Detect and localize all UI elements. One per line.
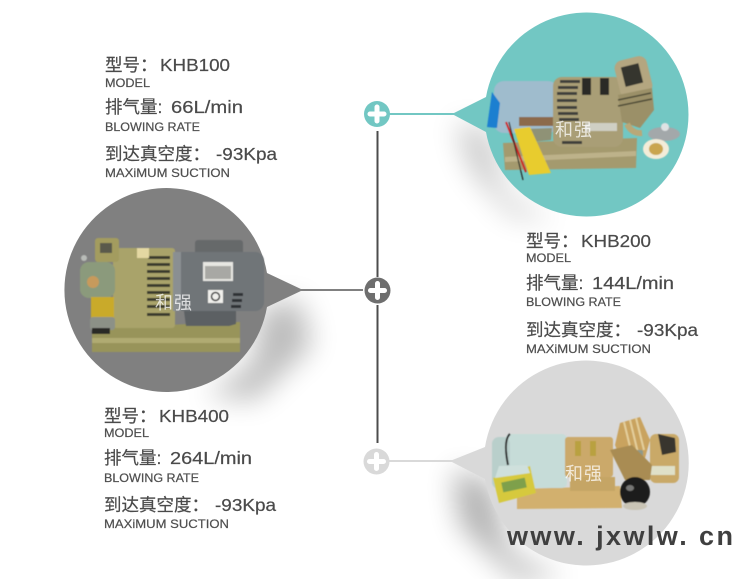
text block: KHB100 specs: 排气量: (105, 97, 162, 117)
text block: KHB400 specs: 排气量: (104, 448, 161, 468)
watermark: 和强 (565, 464, 603, 484)
text block: KHB100 specs: MODEL (105, 76, 150, 90)
panel: KHB400 grey bubble (64, 188, 391, 392)
text block: KHB200 specs: 144L/min (592, 273, 674, 293)
text block: KHB200 specs (526, 231, 698, 356)
panel: KHB100 light bubble (364, 360, 689, 566)
bubble shape (452, 12, 688, 216)
shadow: left bubble (205, 300, 312, 400)
text block: KHB200 specs: BLOWING RATE (526, 295, 621, 309)
pump illustration: KHB400 (80, 238, 264, 352)
text block: KHB200 specs: 到达真空度： (526, 320, 631, 340)
text block: KHB200 specs: KHB200 (581, 231, 651, 251)
bubble shape (450, 360, 689, 566)
text block: KHB400 specs: -93Kpa (215, 495, 276, 515)
text block: KHB100 specs (105, 55, 277, 180)
text block: KHB200 specs: MAXiMUM SUCTION (526, 342, 651, 356)
text block: KHB100 specs: 到达真空度： (105, 144, 210, 164)
text block: KHB100 specs: KHB100 (160, 55, 230, 75)
text block: KHB400 specs: MODEL (104, 426, 149, 440)
watermark: 和强 (555, 120, 593, 140)
text block: KHB100 specs: 66L/min (171, 97, 243, 117)
plus icon (364, 101, 390, 127)
panel: KHB200 teal bubble (364, 12, 688, 216)
watermark: website url: www. jxwlw. cn (506, 521, 733, 551)
text block: KHB400 specs: BLOWING RATE (104, 471, 199, 485)
plus icon (364, 448, 390, 474)
connector line (301, 289, 363, 291)
text block: KHB400 specs: KHB400 (159, 406, 229, 426)
text block: KHB400 specs: 到达真空度： (104, 495, 209, 515)
connector line (389, 113, 454, 115)
text block: KHB400 specs: 264L/min (170, 448, 252, 468)
text block: KHB400 specs (104, 406, 276, 531)
shadow: bottom bubble (453, 470, 565, 578)
text block: KHB100 specs: MAXiMUM SUCTION (105, 166, 230, 180)
text block: KHB200 specs: MODEL (526, 251, 571, 265)
pump illustration: KHB200 (487, 54, 680, 180)
watermark: 和强 (155, 293, 193, 313)
shadow: top bubble (455, 122, 555, 222)
text block: KHB100 specs: -93Kpa (216, 144, 277, 164)
text block: KHB200 specs: 排气量: (526, 273, 583, 293)
text block: KHB400 specs: 型号： (104, 406, 156, 426)
connector spine (376, 131, 378, 443)
text block: KHB100 specs: BLOWING RATE (105, 120, 200, 134)
text block: KHB200 specs: -93Kpa (637, 320, 698, 340)
bubble shape (64, 188, 303, 392)
plus icon (364, 278, 390, 304)
connector line (389, 460, 453, 462)
pump illustration: KHB100 (492, 417, 679, 510)
text block: KHB200 specs: 型号： (526, 231, 578, 251)
text block: KHB100 specs: 型号： (105, 55, 158, 75)
text block: KHB400 specs: MAXiMUM SUCTION (104, 517, 229, 531)
